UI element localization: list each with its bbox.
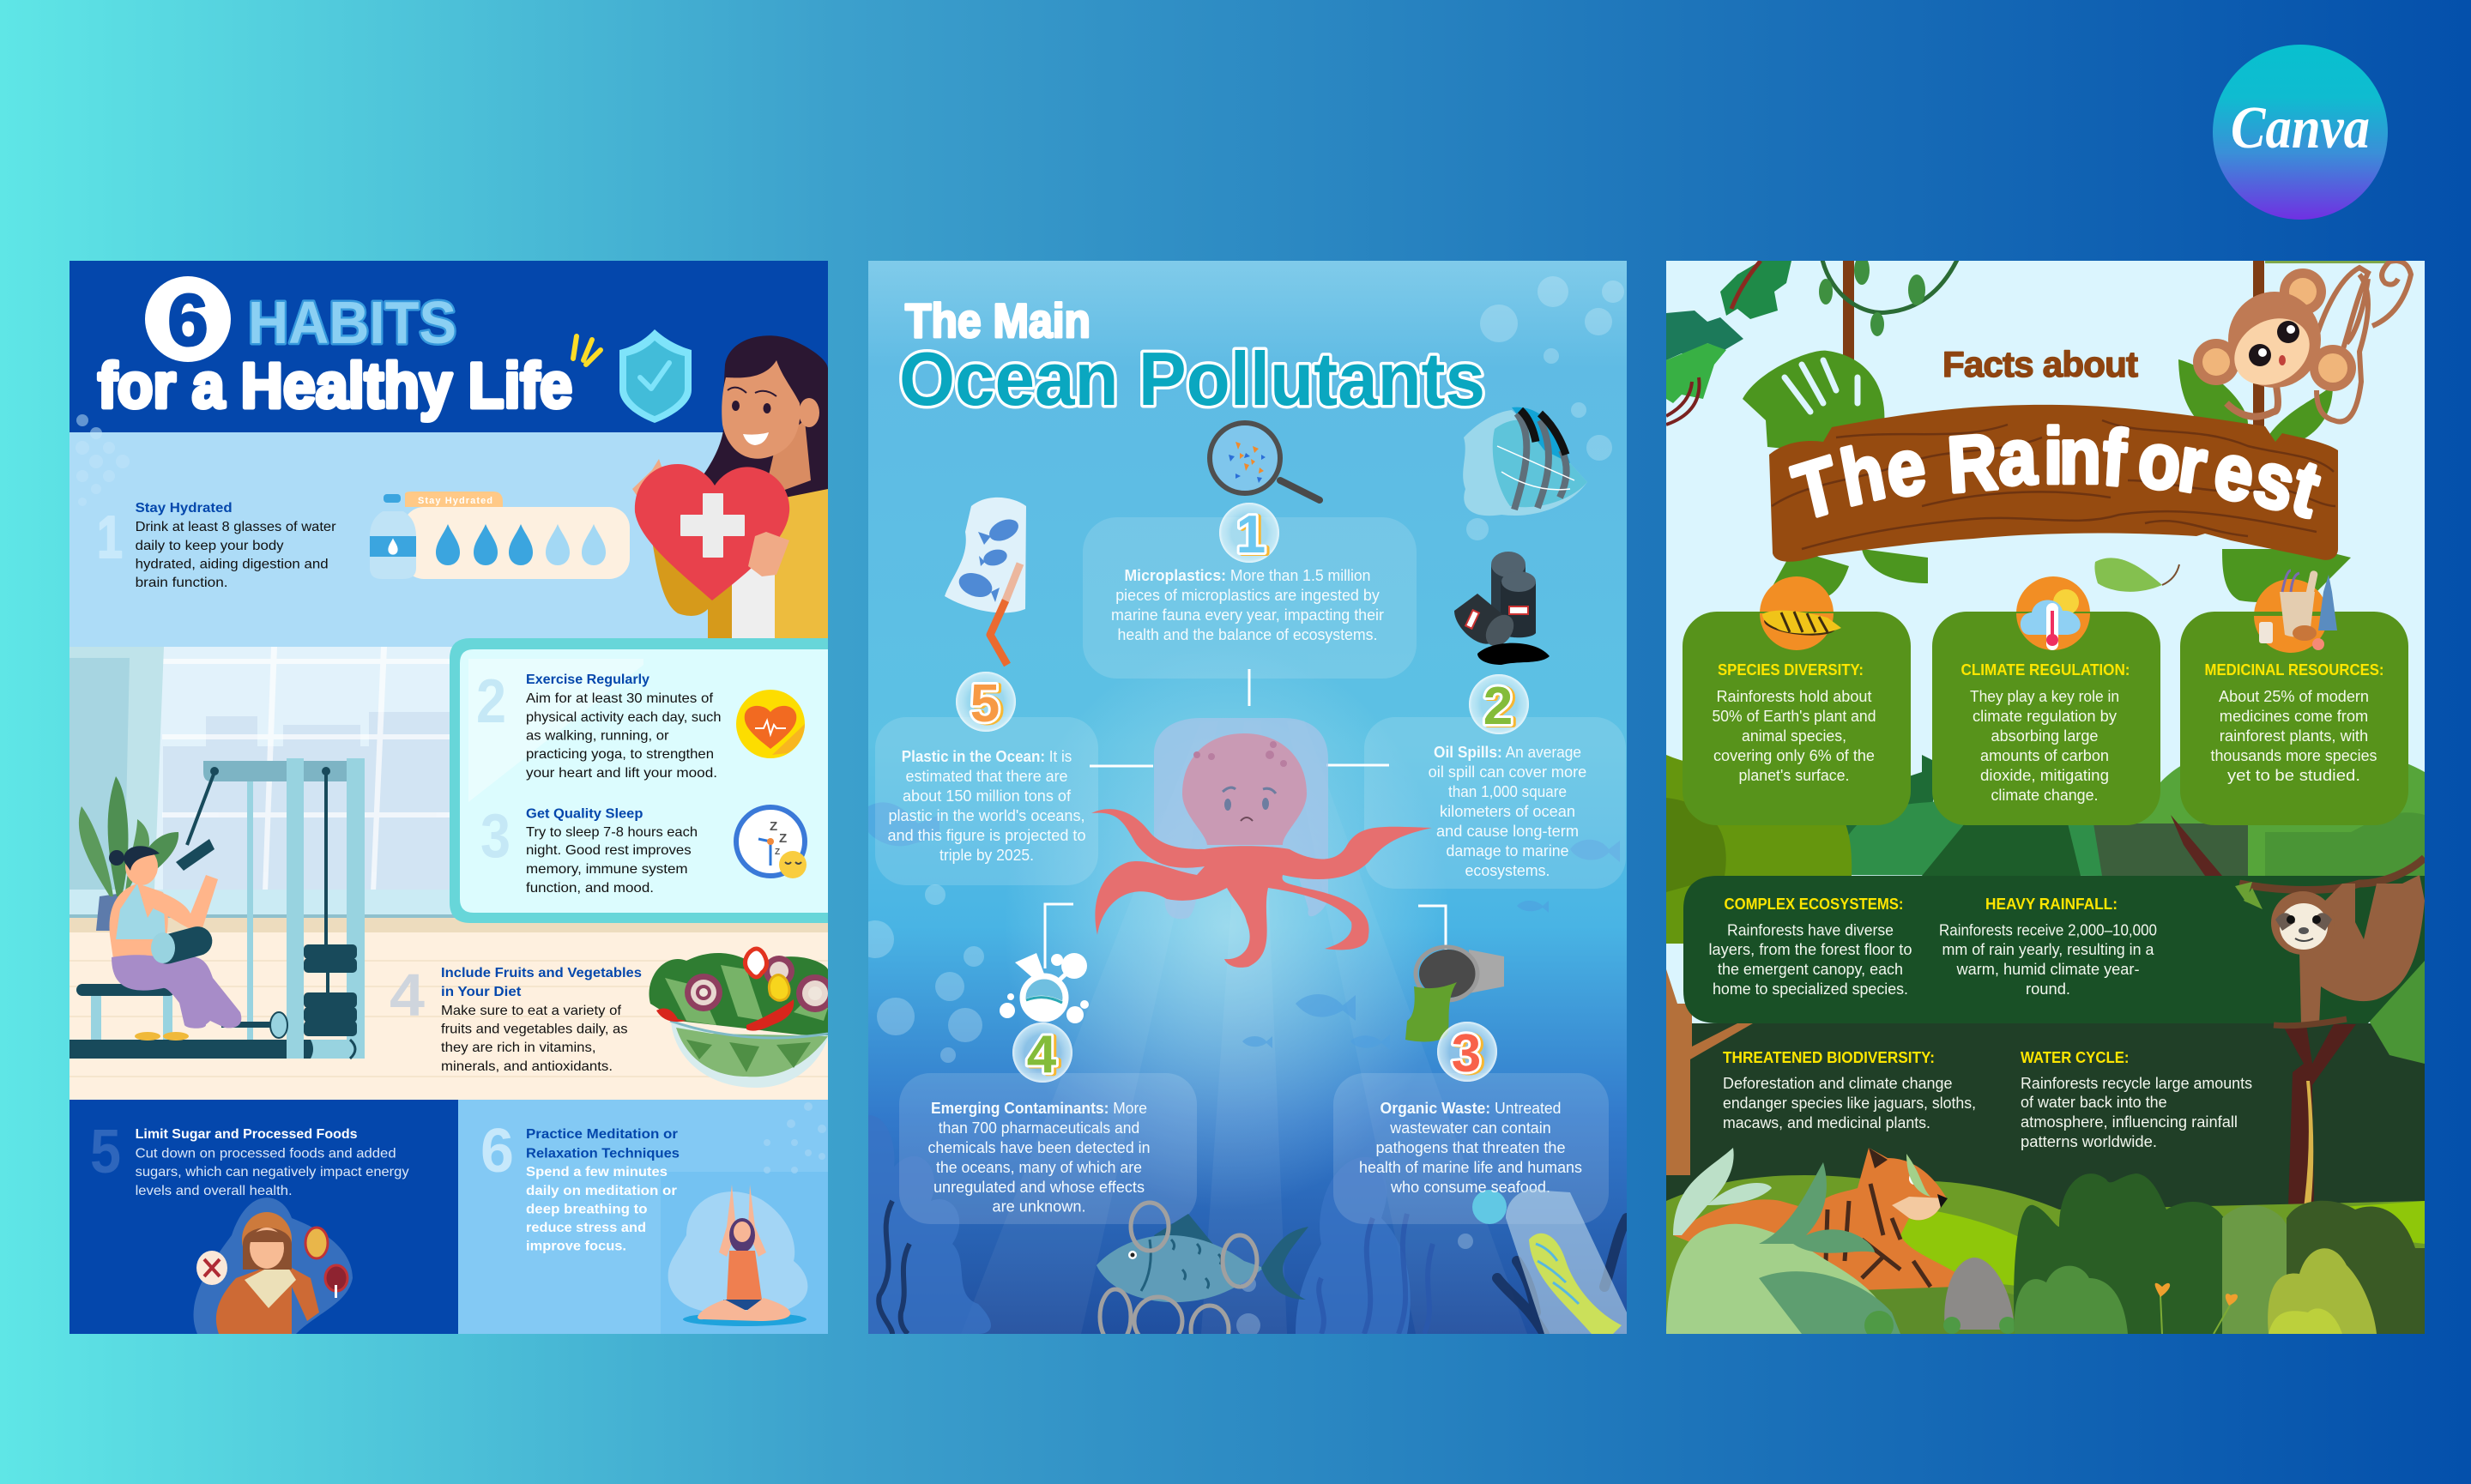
icon: mortar and herbs bbox=[2259, 570, 2337, 650]
text: microplastics: health and the balance of ecosystems. bbox=[1117, 626, 1378, 643]
step 2 text: practicing yoga, to strengthen bbox=[526, 747, 714, 762]
card: meditation: daily on meditation or bbox=[526, 1184, 677, 1198]
background bubbles bbox=[856, 276, 1624, 1337]
panel: complex ecosystems and rainfall: home to specialized species. bbox=[1713, 980, 1908, 998]
text: organic waste: wastewater can contain bbox=[1389, 1119, 1551, 1137]
icon: pipe with organic waste bbox=[1405, 947, 1504, 1041]
card: meditation: reduce stress and bbox=[526, 1221, 646, 1235]
icon: oil barrels bbox=[1454, 552, 1550, 665]
text: organic waste: pathogens that threaten the bbox=[1376, 1139, 1565, 1156]
step 1: stay hydrated text: brain function. bbox=[136, 576, 228, 590]
step 2 text: Exercise Regularly bbox=[526, 673, 649, 687]
panel: complex ecosystems and rainfall: layers, from the forest floor to bbox=[1709, 941, 1912, 958]
plant bbox=[79, 776, 178, 931]
woman refusing sugar bbox=[196, 1212, 347, 1334]
card: medicinal resources: About 25% of modern bbox=[2219, 688, 2369, 705]
icon: fish tangled in rings bbox=[1097, 1203, 1308, 1354]
panel: complex ecosystems and rainfall: COMPLEX ECOSYSTEMS: bbox=[1725, 896, 1903, 913]
card: medicinal resources: MEDICINAL RESOURCES: bbox=[2205, 661, 2383, 679]
bushes and flowers bbox=[2014, 1173, 2425, 1334]
step 1: stay hydrated text: Drink at least 8 glasses of water bbox=[136, 520, 336, 534]
card: medicinal resources: thousands more species bbox=[2210, 747, 2377, 764]
text: oil spills: ecosystems. bbox=[1465, 862, 1550, 879]
title: facts about: Facts about bbox=[1942, 344, 2138, 384]
top vines and palms bbox=[1666, 256, 2264, 431]
numbered bubble 1: 1 bbox=[1236, 505, 1266, 564]
card: meditation: Spend a few minutes bbox=[526, 1165, 668, 1179]
step 4 text: Include Fruits and Vegetables bbox=[441, 966, 642, 980]
woman holding heart bbox=[632, 335, 828, 638]
text: water cycle: patterns worldwide. bbox=[2021, 1133, 2157, 1150]
yoga woman bbox=[683, 1185, 807, 1326]
card: climate regulation: climate regulation by bbox=[1973, 708, 2117, 725]
background fish silhouettes bbox=[868, 802, 1620, 1050]
panel: complex ecosystems and rainfall: warm, humid climate year- bbox=[1955, 961, 2140, 978]
text cards bbox=[875, 517, 1626, 1224]
numbered bubble 5: 5 bbox=[970, 674, 1000, 733]
card: climate regulation: dioxide, mitigating bbox=[1980, 767, 2109, 784]
card: limit sugar: Cut down on processed foods and added bbox=[136, 1147, 396, 1161]
numbered bubble 5 bbox=[956, 672, 1016, 733]
text: plastic in the ocean: estimated that there are bbox=[906, 768, 1067, 785]
text: water cycle: Rainforests recycle large amounts bbox=[2021, 1075, 2252, 1092]
icon: sleep clock: Z bbox=[775, 848, 780, 857]
card: limit sugar bbox=[69, 1100, 458, 1334]
connector lines bbox=[1045, 669, 1446, 968]
text: organic waste bbox=[1359, 1100, 1582, 1196]
text: microplastics: Microplastics: More than 1.5 million bbox=[1124, 567, 1371, 584]
text: emerging contaminants: Emerging Contaminants: More bbox=[931, 1100, 1147, 1117]
step 4 text: fruits and vegetables daily, as bbox=[441, 1023, 628, 1037]
gym machine bbox=[69, 758, 365, 1059]
icon: plastic bag with fish and straw bbox=[945, 498, 1026, 665]
coral and seaweed bbox=[868, 1115, 1627, 1334]
card: exercise and sleep bbox=[450, 638, 828, 923]
text: emerging contaminants: chemicals have been detected in bbox=[928, 1139, 1150, 1156]
step 4 text: in Your Diet bbox=[441, 985, 522, 999]
step 2 text: your heart and lift your mood. bbox=[526, 766, 717, 781]
title: 6 habits: 6 bbox=[168, 280, 208, 360]
card: medicinal resources: rainforest plants, with bbox=[2220, 727, 2368, 745]
step 3 text: function, and mood. bbox=[526, 881, 654, 896]
card: climate regulation: CLIMATE REGULATION: bbox=[1961, 661, 2130, 679]
icon: striped angelfish bbox=[1463, 407, 1587, 516]
text: organic waste: Organic Waste: Untreated bbox=[1380, 1100, 1562, 1117]
numbered bubble 3: 3 bbox=[1452, 1024, 1481, 1083]
icon: water intake tracker bbox=[370, 492, 630, 579]
text: plastic in the ocean: and this figure is projected to bbox=[887, 827, 1086, 844]
step 3 text: Try to sleep 7-8 hours each bbox=[526, 825, 698, 840]
text: oil spills: oil spill can cover more bbox=[1429, 763, 1586, 781]
light blue hydration band bbox=[69, 432, 722, 647]
panel: complex ecosystems and rainfall: mm of rain yearly, resulting in a bbox=[1942, 941, 2154, 958]
step 4 text: they are rich in vitamins, bbox=[441, 1041, 595, 1055]
step 2 text: Aim for at least 30 minutes of bbox=[526, 691, 714, 706]
card: meditation: improve focus. bbox=[526, 1240, 626, 1254]
text: plastic in the ocean: plastic in the world's oceans, bbox=[889, 807, 1084, 824]
card: species diversity: SPECIES DIVERSITY: bbox=[1718, 661, 1864, 679]
step 4 text: Make sure to eat a variety of bbox=[441, 1004, 622, 1018]
panel: complex ecosystems and rainfall: round. bbox=[2026, 980, 2070, 998]
icon: salad bowl bbox=[649, 949, 834, 1088]
step 3 text: 3 bbox=[480, 802, 511, 871]
numbered bubble 2 bbox=[1469, 674, 1529, 736]
step 1: stay hydrated text bbox=[97, 501, 336, 590]
numbered bubble 2: 2 bbox=[1483, 677, 1513, 736]
text: microplastics: pieces of microplastics are ingested by bbox=[1115, 587, 1380, 604]
text: water cycle: atmosphere, influencing rainfall bbox=[2021, 1113, 2238, 1131]
card: climate regulation bbox=[1932, 576, 2160, 825]
icon: gila lizard bbox=[1762, 611, 1841, 638]
header band bbox=[69, 261, 828, 433]
text: water cycle: of water back into the bbox=[2021, 1094, 2167, 1111]
step 2 text bbox=[476, 667, 721, 781]
text: threatened biodiversity bbox=[1723, 1049, 1976, 1131]
card: meditation: Relaxation Techniques bbox=[526, 1147, 680, 1161]
text: oil spills: Oil Spills: An average bbox=[1434, 744, 1581, 761]
step 3 text: Get Quality Sleep bbox=[526, 806, 643, 822]
title: Ocean Pollutants bbox=[899, 336, 1485, 421]
step 4 text: minerals, and antioxidants. bbox=[441, 1059, 613, 1074]
step 3 text: night. Good rest improves bbox=[526, 843, 692, 858]
step 1: stay hydrated text: daily to keep your body bbox=[136, 539, 284, 553]
panel: complex ecosystems and rainfall bbox=[1683, 876, 2425, 1023]
gym scene bbox=[69, 647, 828, 1077]
card: limit sugar: sugars, which can negatively impact energy bbox=[136, 1165, 409, 1179]
text: oil spills: kilometers of ocean bbox=[1440, 803, 1575, 820]
text: emerging contaminants: are unknown. bbox=[992, 1197, 1086, 1215]
card: meditation: deep breathing to bbox=[526, 1202, 648, 1216]
forest background bbox=[1666, 755, 2425, 944]
card: meditation: 6 bbox=[480, 1117, 514, 1185]
card: medicinal resources: yet to be studied. bbox=[2227, 767, 2360, 784]
text: threatened biodiversity: macaws, and medicinal plants. bbox=[1723, 1114, 1930, 1131]
title: 6 habits: for a Healthy Life bbox=[98, 350, 572, 421]
title: 6 habits: HABITS bbox=[248, 289, 456, 356]
card: climate regulation: climate change. bbox=[1991, 787, 2099, 804]
text: organic waste: who consume seafood. bbox=[1390, 1179, 1550, 1196]
text: oil spills: than 1,000 square bbox=[1448, 783, 1567, 800]
text: organic waste: health of marine life and humans bbox=[1359, 1159, 1582, 1176]
title: The Main bbox=[905, 293, 1091, 347]
wooden sign bbox=[1769, 405, 2338, 562]
icon: sleep clock: Z bbox=[779, 831, 787, 846]
panel: the rainforest bbox=[1666, 256, 2425, 1340]
icon: shield bbox=[619, 329, 692, 423]
icon: monkey bbox=[2193, 260, 2411, 422]
text: emerging contaminants: unregulated and whose effects bbox=[933, 1179, 1145, 1196]
card: species diversity: planet's surface. bbox=[1738, 767, 1850, 784]
card: meditation bbox=[458, 1100, 828, 1334]
numbered bubble 3 bbox=[1437, 1022, 1497, 1083]
card: species diversity: animal species, bbox=[1742, 727, 1846, 745]
card: medicinal resources: medicines come from bbox=[2220, 708, 2368, 725]
card: limit sugar: levels and overall health. bbox=[136, 1184, 293, 1198]
Canva logo badge bbox=[2213, 45, 2388, 220]
card: meditation: Practice Meditation or bbox=[526, 1127, 678, 1142]
ground hills and plants bbox=[1666, 1175, 2425, 1334]
text: emerging contaminants bbox=[928, 1100, 1150, 1215]
step 3 text: memory, immune system bbox=[526, 862, 688, 877]
icon: heartbeat bbox=[736, 690, 805, 758]
card: climate regulation: They play a key role in bbox=[1970, 688, 2119, 705]
text: oil spills: and cause long-term bbox=[1436, 823, 1579, 840]
icon: bottle with trapped fish bbox=[1506, 1189, 1627, 1334]
tiger bbox=[1673, 1148, 1965, 1291]
octopus in plastic bag bbox=[1091, 718, 1432, 968]
card: species diversity: 50% of Earth's plant and bbox=[1713, 708, 1876, 725]
text: water cycle: WATER CYCLE: bbox=[2021, 1049, 2130, 1066]
title: 6 habits bbox=[98, 276, 572, 421]
numbered bubble 4 bbox=[1012, 1023, 1072, 1084]
card: species diversity: covering only 6% of the bbox=[1713, 747, 1875, 764]
step 2 text: physical activity each day, such bbox=[526, 710, 721, 725]
icon: yellow sparks bbox=[573, 336, 601, 365]
step 1: stay hydrated text: Stay Hydrated bbox=[136, 501, 233, 516]
panel: complex ecosystems and rainfall: the emergent canopy, each bbox=[1718, 961, 1903, 978]
text: oil spills: damage to marine bbox=[1447, 842, 1568, 860]
card: climate regulation: absorbing large bbox=[1991, 727, 2099, 745]
text: microplastics bbox=[1111, 567, 1384, 643]
icon: sleep clock: Z bbox=[770, 819, 777, 834]
text: oil spills bbox=[1429, 744, 1586, 879]
text: plastic in the ocean bbox=[887, 748, 1086, 864]
card: species diversity: Rainforests hold about bbox=[1716, 688, 1872, 705]
panel: 6 habits for a healthy life bbox=[69, 261, 834, 1334]
text: emerging contaminants: the oceans, many of which are bbox=[936, 1159, 1142, 1176]
exercising woman bbox=[109, 839, 241, 1041]
step 2 text: 2 bbox=[476, 667, 506, 736]
panel: ocean pollutants bbox=[856, 261, 1627, 1354]
step 3 text bbox=[480, 802, 698, 896]
icon: cloud thermometer bbox=[2021, 589, 2081, 650]
icon: flask with chemicals bbox=[1000, 953, 1089, 1023]
card: climate regulation: amounts of carbon bbox=[1980, 747, 2109, 764]
panel: complex ecosystems and rainfall: Rainforests receive 2,000–10,000 bbox=[1939, 922, 2157, 939]
text: threatened biodiversity: THREATENED BIODIVERSITY: bbox=[1723, 1049, 1935, 1066]
text: water cycle bbox=[2021, 1049, 2252, 1150]
card: species diversity bbox=[1683, 576, 1911, 825]
text: microplastics: marine fauna every year, impacting their bbox=[1111, 606, 1384, 624]
foreground plants bbox=[1666, 1148, 2016, 1340]
text: plastic in the ocean: about 150 million tons of bbox=[903, 787, 1072, 805]
Canva logo badge: Canva bbox=[2231, 95, 2370, 161]
text: threatened biodiversity: Deforestation and climate change bbox=[1723, 1075, 1953, 1092]
step 1: stay hydrated text: 1 bbox=[97, 504, 123, 570]
card: limit sugar: 5 bbox=[90, 1118, 121, 1186]
step 1: stay hydrated text: hydrated, aiding digestion and bbox=[136, 558, 329, 571]
title bbox=[899, 293, 1485, 421]
icon: sleep clock bbox=[736, 807, 807, 878]
numbered bubble 1 bbox=[1219, 503, 1279, 564]
step 4 text: 4 bbox=[390, 962, 425, 1029]
dark lower background bbox=[1666, 875, 2425, 1272]
numbered bubble 4: 4 bbox=[1027, 1025, 1057, 1084]
panel: complex ecosystems and rainfall: Rainforests have diverse bbox=[1727, 922, 1894, 939]
text: plastic in the ocean: triple by 2025. bbox=[939, 847, 1034, 864]
icon: water intake tracker: Stay Hydrated bbox=[418, 496, 492, 506]
card: medicinal resources bbox=[2180, 570, 2408, 825]
icon: sloth bbox=[2235, 858, 2425, 1026]
panel: complex ecosystems and rainfall: HEAVY RAINFALL: bbox=[1985, 896, 2118, 913]
title: the rainforest curved text: The Rainforest bbox=[1786, 413, 2328, 538]
text: plastic in the ocean: Plastic in the Ocean: It is bbox=[902, 748, 1072, 765]
icon: magnifier with microplastics bbox=[1210, 423, 1320, 500]
card: limit sugar: Limit Sugar and Processed Foods bbox=[136, 1127, 358, 1142]
text: emerging contaminants: than 700 pharmaceuticals and bbox=[939, 1119, 1139, 1137]
text: threatened biodiversity: endanger species like jaguars, sloths, bbox=[1723, 1095, 1976, 1112]
step 4 text bbox=[390, 962, 642, 1074]
monstera and leaves bbox=[1743, 351, 2351, 602]
step 2 text: as walking, running, or bbox=[526, 729, 669, 743]
